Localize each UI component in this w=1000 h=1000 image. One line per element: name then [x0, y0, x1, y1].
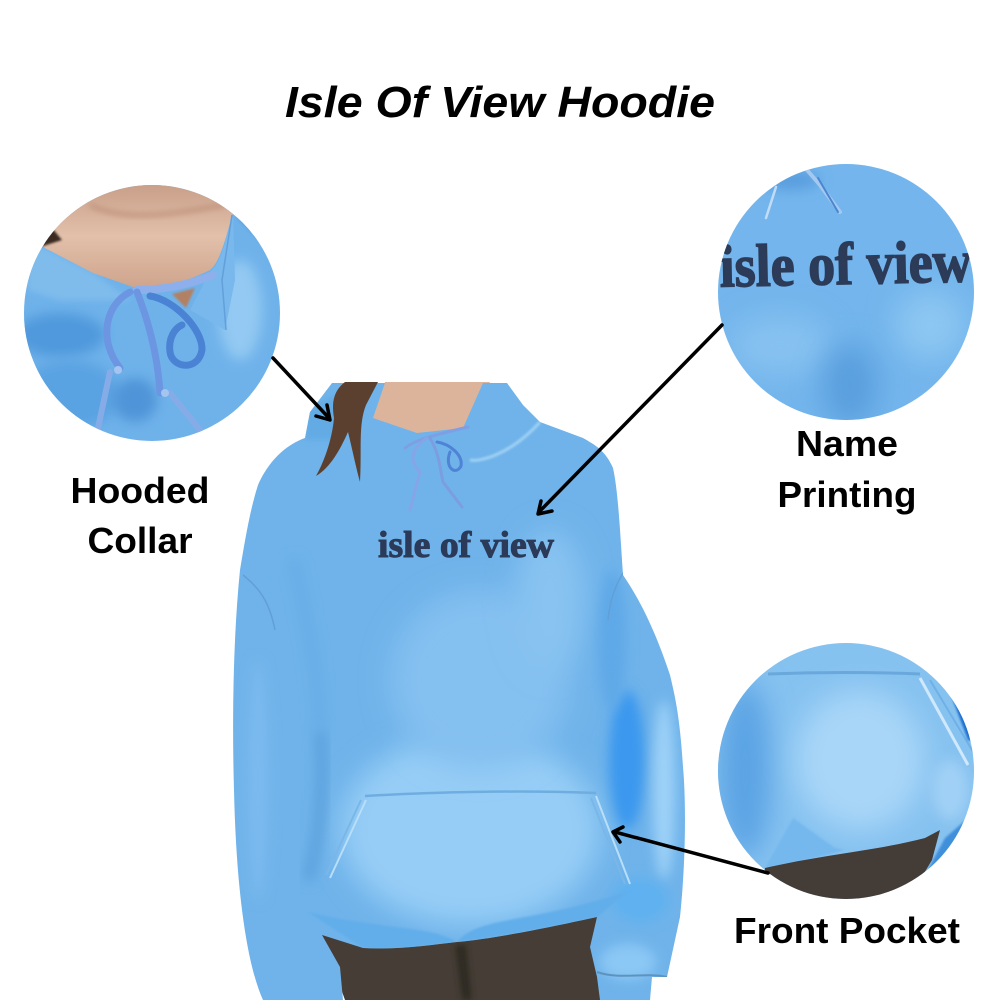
folds between torso and sleeves	[308, 730, 322, 880]
hood shading	[470, 422, 540, 460]
shoulder seams	[243, 575, 275, 630]
skin	[43, 185, 233, 288]
label: name printing	[778, 423, 916, 515]
arrow: name printing	[538, 325, 722, 514]
drawstring	[98, 275, 213, 430]
sweatshirt	[220, 375, 700, 1000]
drawstrings	[405, 427, 468, 510]
circle: front pocket detail	[718, 643, 985, 905]
arrow: collar	[273, 358, 330, 420]
neck opening shadow	[172, 288, 195, 308]
pants	[764, 830, 940, 899]
sleeve shadow	[950, 696, 971, 742]
label: name printing: Name	[796, 423, 898, 464]
lower right sleeve	[926, 820, 964, 871]
pocket stitching	[768, 672, 920, 674]
drawstring ends	[766, 170, 840, 218]
collar shading	[15, 313, 105, 357]
torso light areas	[340, 735, 600, 925]
label: front pocket: Front Pocket	[734, 910, 960, 951]
hair	[316, 382, 378, 482]
arrow: front pocket	[613, 827, 768, 873]
printed name: isle of view	[378, 525, 554, 566]
label: hooded collar	[70, 470, 210, 561]
printed name close-up: isle of view	[719, 228, 973, 300]
label: hooded collar: Hooded	[70, 470, 210, 511]
left sleeve light strip	[250, 682, 266, 878]
right arm shading	[609, 690, 645, 830]
circle: hooded collar detail	[15, 185, 280, 441]
label: name printing: Printing	[778, 474, 916, 515]
pocket	[326, 792, 630, 884]
circle: name printing detail	[718, 164, 974, 427]
hem band	[313, 898, 610, 948]
hoodie photo	[220, 375, 700, 1000]
title: Isle Of View Hoodie	[285, 78, 715, 127]
label: hooded collar: Collar	[88, 520, 192, 561]
hood edge right	[190, 213, 235, 330]
neck	[372, 382, 490, 436]
hem fold	[766, 818, 845, 868]
pants	[320, 912, 600, 1000]
